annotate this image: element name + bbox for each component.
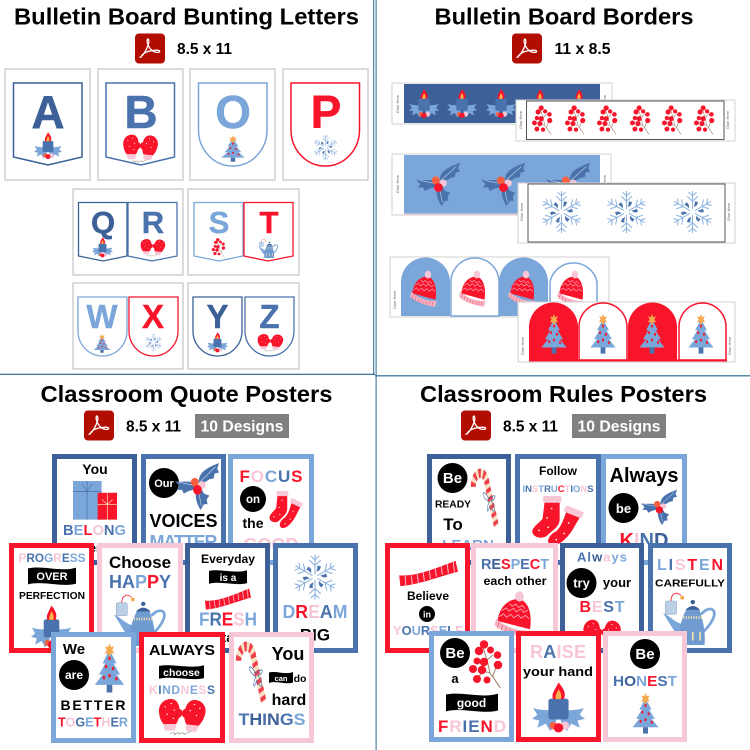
bunting card Y Z: Z — [259, 298, 280, 335]
poster: choose happy — [97, 543, 183, 653]
icon: pdf — [84, 410, 114, 440]
poster: always be kind: be — [616, 501, 631, 516]
poster: you can do hard things: hard — [272, 692, 306, 709]
bunting card B: B — [124, 86, 158, 138]
poster: always try your best: try — [573, 576, 591, 590]
poster: we are better together — [51, 632, 136, 743]
poster: respect each other: each other — [484, 574, 547, 588]
heading: quote posters: Classroom Quote Posters — [40, 381, 332, 407]
icon: pdf — [512, 34, 542, 64]
border strip: candles — [392, 83, 612, 124]
poster: follow instructions — [515, 454, 601, 565]
poster: always choose kindness: KINDNESS — [149, 683, 215, 697]
poster: believe in yourself: YOURSELF — [393, 623, 463, 638]
poster: always try your best — [560, 543, 644, 653]
poster: believe in yourself — [385, 543, 470, 653]
poster: be honest — [603, 631, 687, 742]
poster: be a good friend — [429, 631, 514, 742]
poster: progress over perfection: OVER — [36, 571, 68, 583]
poster: be ready to learn: LEARN — [442, 537, 494, 554]
poster: focus on the good — [228, 454, 314, 565]
border strip: berries — [516, 100, 735, 141]
poster: our voices matter: Our — [154, 478, 174, 490]
poster: believe in yourself: Believe — [407, 589, 449, 603]
bunting card Q R — [73, 189, 183, 275]
poster: believe in yourself: in — [423, 610, 431, 620]
poster: you can do hard things — [229, 632, 314, 743]
poster: you belong: You — [82, 461, 108, 477]
border strip: candles: Glue Here — [602, 94, 607, 113]
poster: everyday is a fresh start: Start — [213, 630, 243, 645]
border strip: hats — [390, 257, 609, 317]
size label: 8.5 x 11 — [177, 41, 232, 58]
poster: dream big: BIG — [300, 626, 330, 644]
poster: focus on the good: on — [246, 494, 260, 506]
border strip: berries: Glue Here — [518, 110, 523, 129]
border strip: trees: Glue Here — [727, 336, 732, 355]
badge: 10 designs — [572, 414, 666, 438]
poster: focus on the good: GOOD — [243, 535, 299, 555]
poster: dream big: DREAM — [282, 602, 348, 622]
heading: borders: Bulletin Board Borders — [434, 4, 694, 30]
poster: we are better together: We — [63, 641, 85, 658]
poster: dream big — [273, 543, 358, 653]
bunting card Y Z — [188, 283, 299, 369]
poster: follow instructions: INSTRUCTIONS — [522, 484, 594, 495]
poster: you can do hard things: You — [272, 644, 304, 664]
border strip: trees — [518, 302, 735, 362]
poster: everyday is a fresh start: is a — [220, 573, 237, 584]
size label: 8.5 x 11 — [503, 418, 558, 436]
bunting card Q R: Q — [91, 205, 115, 240]
heading: bunting letters: Bulletin Board Bunting Letters — [14, 4, 359, 30]
border strip: candles: Glue Here — [395, 94, 400, 113]
poster: always choose kindness — [139, 632, 225, 743]
bunting card O: O — [215, 86, 251, 138]
panel: classroom quote posters — [9, 381, 358, 743]
poster: follow instructions: Follow — [539, 464, 578, 478]
poster: listen carefully: LISTEN — [657, 557, 723, 574]
panel: classroom rules posters — [385, 381, 732, 742]
poster: always try your best: BEST — [580, 599, 625, 616]
poster: you can do hard things: do — [294, 673, 306, 685]
poster: be a good friend: a — [451, 671, 459, 686]
poster: respect each other: RESPECT — [481, 557, 549, 573]
border strip: trees: Glue Here — [520, 336, 525, 355]
poster: our voices matter — [141, 454, 226, 565]
poster: you can do hard things: THINGS — [238, 710, 306, 729]
bunting card S T: S — [209, 205, 229, 240]
poster: always choose kindness: choose — [163, 667, 200, 679]
poster: listen carefully: CAREFULLY — [655, 578, 725, 590]
bunting card A: A — [31, 86, 65, 138]
panel: bulletin board bunting letters — [5, 4, 368, 369]
bunting card W X: X — [142, 298, 164, 335]
poster: we are better together: TOGETHER — [58, 714, 129, 730]
poster: raise your hand — [516, 631, 601, 742]
poster: focus on the good: FOCUS — [240, 467, 302, 486]
heading: rules posters: Classroom Rules Posters — [420, 381, 707, 407]
poster: be ready to learn: READY — [435, 500, 471, 510]
border strip: holly: Glue Here — [395, 174, 400, 193]
poster: be honest: HONEST — [613, 673, 677, 690]
panel: bulletin board borders — [390, 4, 735, 362]
bunting card A — [5, 69, 90, 180]
icon: pdf — [135, 34, 165, 64]
poster: we are better together: are — [65, 668, 83, 682]
border strip: snowflakes: Glue Here — [726, 202, 731, 221]
poster: be ready to learn — [427, 454, 511, 565]
poster: everyday is a fresh start: FRESH — [199, 610, 257, 630]
poster: progress over perfection: PERFECTION — [19, 591, 85, 602]
poster: choose happy: Choose — [109, 553, 171, 572]
poster: always try your best: your — [603, 575, 631, 590]
border strip: holly: Glue Here — [602, 174, 607, 193]
poster: raise your hand: RAISE — [530, 642, 586, 662]
poster: always be kind — [601, 454, 687, 565]
border strip: hats: Glue Here — [392, 290, 397, 309]
badge: 10 designs — [195, 414, 289, 438]
bunting card W X — [73, 283, 183, 369]
poster: always try your best: Always — [577, 550, 627, 564]
bunting card P — [283, 69, 368, 180]
poster: be a good friend: good — [457, 696, 486, 710]
poster: be honest: Be — [635, 646, 655, 663]
size label: 11 x 8.5 — [554, 41, 611, 58]
poster: focus on the good: the — [242, 515, 264, 531]
poster: choose happy: HAPPY — [109, 572, 171, 592]
poster: be ready to learn: Be — [443, 470, 462, 487]
border strip: berries: Glue Here — [725, 110, 730, 129]
bunting card Y Z: Y — [206, 298, 229, 335]
badge: 10 designs: 10 Designs — [578, 418, 661, 436]
poster: be a good friend: Be — [445, 645, 465, 662]
poster: always choose kindness: ALWAYS — [149, 643, 215, 659]
bunting card B — [98, 69, 183, 180]
poster: be a good friend: FRIEND — [438, 717, 506, 736]
poster: you belong: Here — [81, 541, 108, 555]
poster: you belong — [52, 454, 137, 565]
poster: you belong: BELONG — [63, 522, 126, 539]
poster: progress over perfection: PROGRESS — [18, 551, 86, 565]
poster: listen carefully — [648, 543, 732, 653]
poster: our voices matter: MATTER — [150, 532, 218, 552]
poster: progress over perfection — [9, 543, 94, 653]
bunting card S T: T — [260, 205, 279, 240]
bunting card O — [190, 69, 275, 180]
bunting card Q R: R — [142, 205, 164, 240]
bunting card S T — [188, 189, 299, 275]
poster: be ready to learn: To — [443, 515, 463, 534]
poster: always be kind: Always — [610, 465, 678, 487]
border strip: snowflakes: Glue Here — [519, 202, 524, 221]
poster: our voices matter: VOICES — [150, 511, 218, 531]
bunting card P: P — [311, 86, 341, 138]
poster: everyday is a fresh start: Everyday — [201, 554, 256, 566]
border strip: snowflakes — [518, 183, 735, 243]
poster: respect each other — [471, 543, 558, 653]
poster: everyday is a fresh start — [185, 543, 270, 653]
poster: we are better together: BETTER — [60, 697, 126, 713]
badge: 10 designs: 10 Designs — [200, 418, 284, 436]
bunting card W X: W — [86, 298, 118, 335]
poster: raise your hand: your hand — [523, 664, 593, 679]
poster: always be kind: KIND — [620, 530, 668, 552]
poster: you can do hard things: can — [275, 674, 288, 683]
icon: pdf — [461, 410, 491, 440]
size label: 8.5 x 11 — [126, 418, 181, 436]
border strip: holly — [392, 154, 611, 215]
